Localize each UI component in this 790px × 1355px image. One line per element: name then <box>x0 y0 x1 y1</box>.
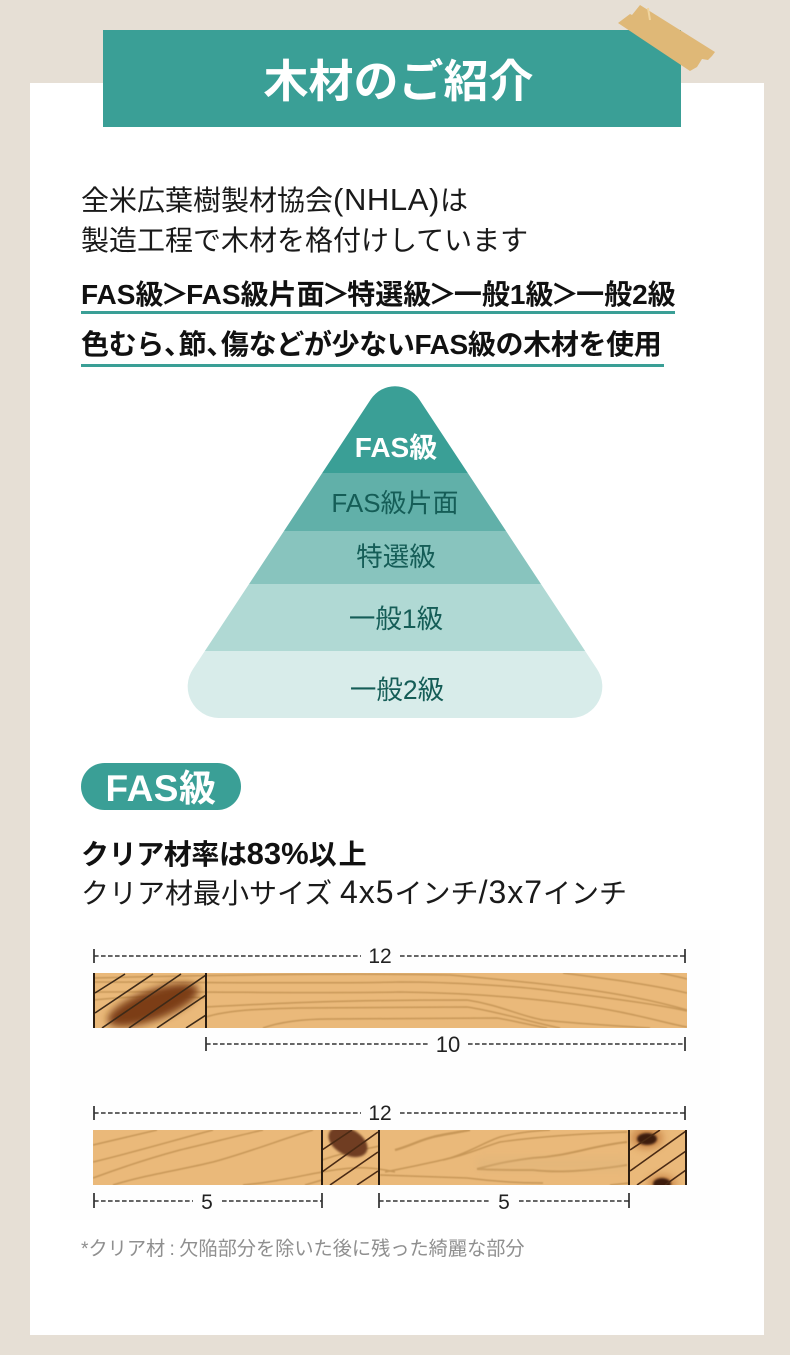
plank 2 dimension: 12 <box>94 1102 685 1125</box>
plank 1 dimension: 10 <box>206 1032 685 1057</box>
intro text: 製造工程で木材を格付けしています <box>81 225 528 256</box>
plank 1 dimension: 12 <box>94 945 685 968</box>
plank 2 dimension: right 5 <box>379 1191 629 1214</box>
usage highlight: 色むら、節、傷などが少ないFAS級の木材を使用 <box>81 329 661 360</box>
section pill heading: FAS級 <box>106 768 216 809</box>
intro text: 全米広葉樹製材協会(NHLA)は <box>81 182 468 217</box>
plank 2 dimension: 12: 12 <box>368 1102 392 1125</box>
plank 2 dimension: right 5: 5 <box>498 1191 510 1214</box>
pyramid label: select: 特選級 <box>356 542 436 572</box>
title banner: 木材のご紹介 <box>263 56 534 107</box>
pyramid chart <box>188 386 602 718</box>
minimum size text: クリア材最小サイズ 4x5インチ/3x7インチ <box>81 874 627 910</box>
icon: masking tape <box>618 5 715 71</box>
plank 1 dimension: 10: 10 <box>436 1032 460 1057</box>
pyramid label: FAS: FAS級 <box>355 432 437 463</box>
knot 3 <box>631 1127 663 1149</box>
grade order highlight: FAS級＞FAS級片面＞特選級＞一般1級＞一般2級 <box>81 279 676 310</box>
clear rate text: クリア材率は83%以上 <box>81 836 369 871</box>
plank 2 with defects <box>93 1130 687 1185</box>
knot 1 <box>103 978 203 1028</box>
pyramid label: FAS one side: FAS級片面 <box>331 488 459 518</box>
footnote: *クリア材 : 欠陥部分を除いた後に残った綺麗な部分 <box>81 1239 525 1260</box>
section pill heading <box>81 763 241 810</box>
plank 2 dimension: left 5 <box>94 1191 322 1214</box>
intro text <box>81 182 528 256</box>
plank 2 dimension: left 5: 5 <box>201 1191 213 1214</box>
pyramid label: common 2: 一般2級 <box>350 675 444 705</box>
pyramid label: common 1: 一般1級 <box>349 604 443 634</box>
plank 1 dimension: 12: 12 <box>368 945 392 968</box>
plank 1 with defect <box>93 973 687 1028</box>
knot 2 <box>327 1130 369 1159</box>
title banner <box>103 30 681 127</box>
wood diagrams <box>93 945 687 1214</box>
knot 4 <box>646 1172 678 1185</box>
